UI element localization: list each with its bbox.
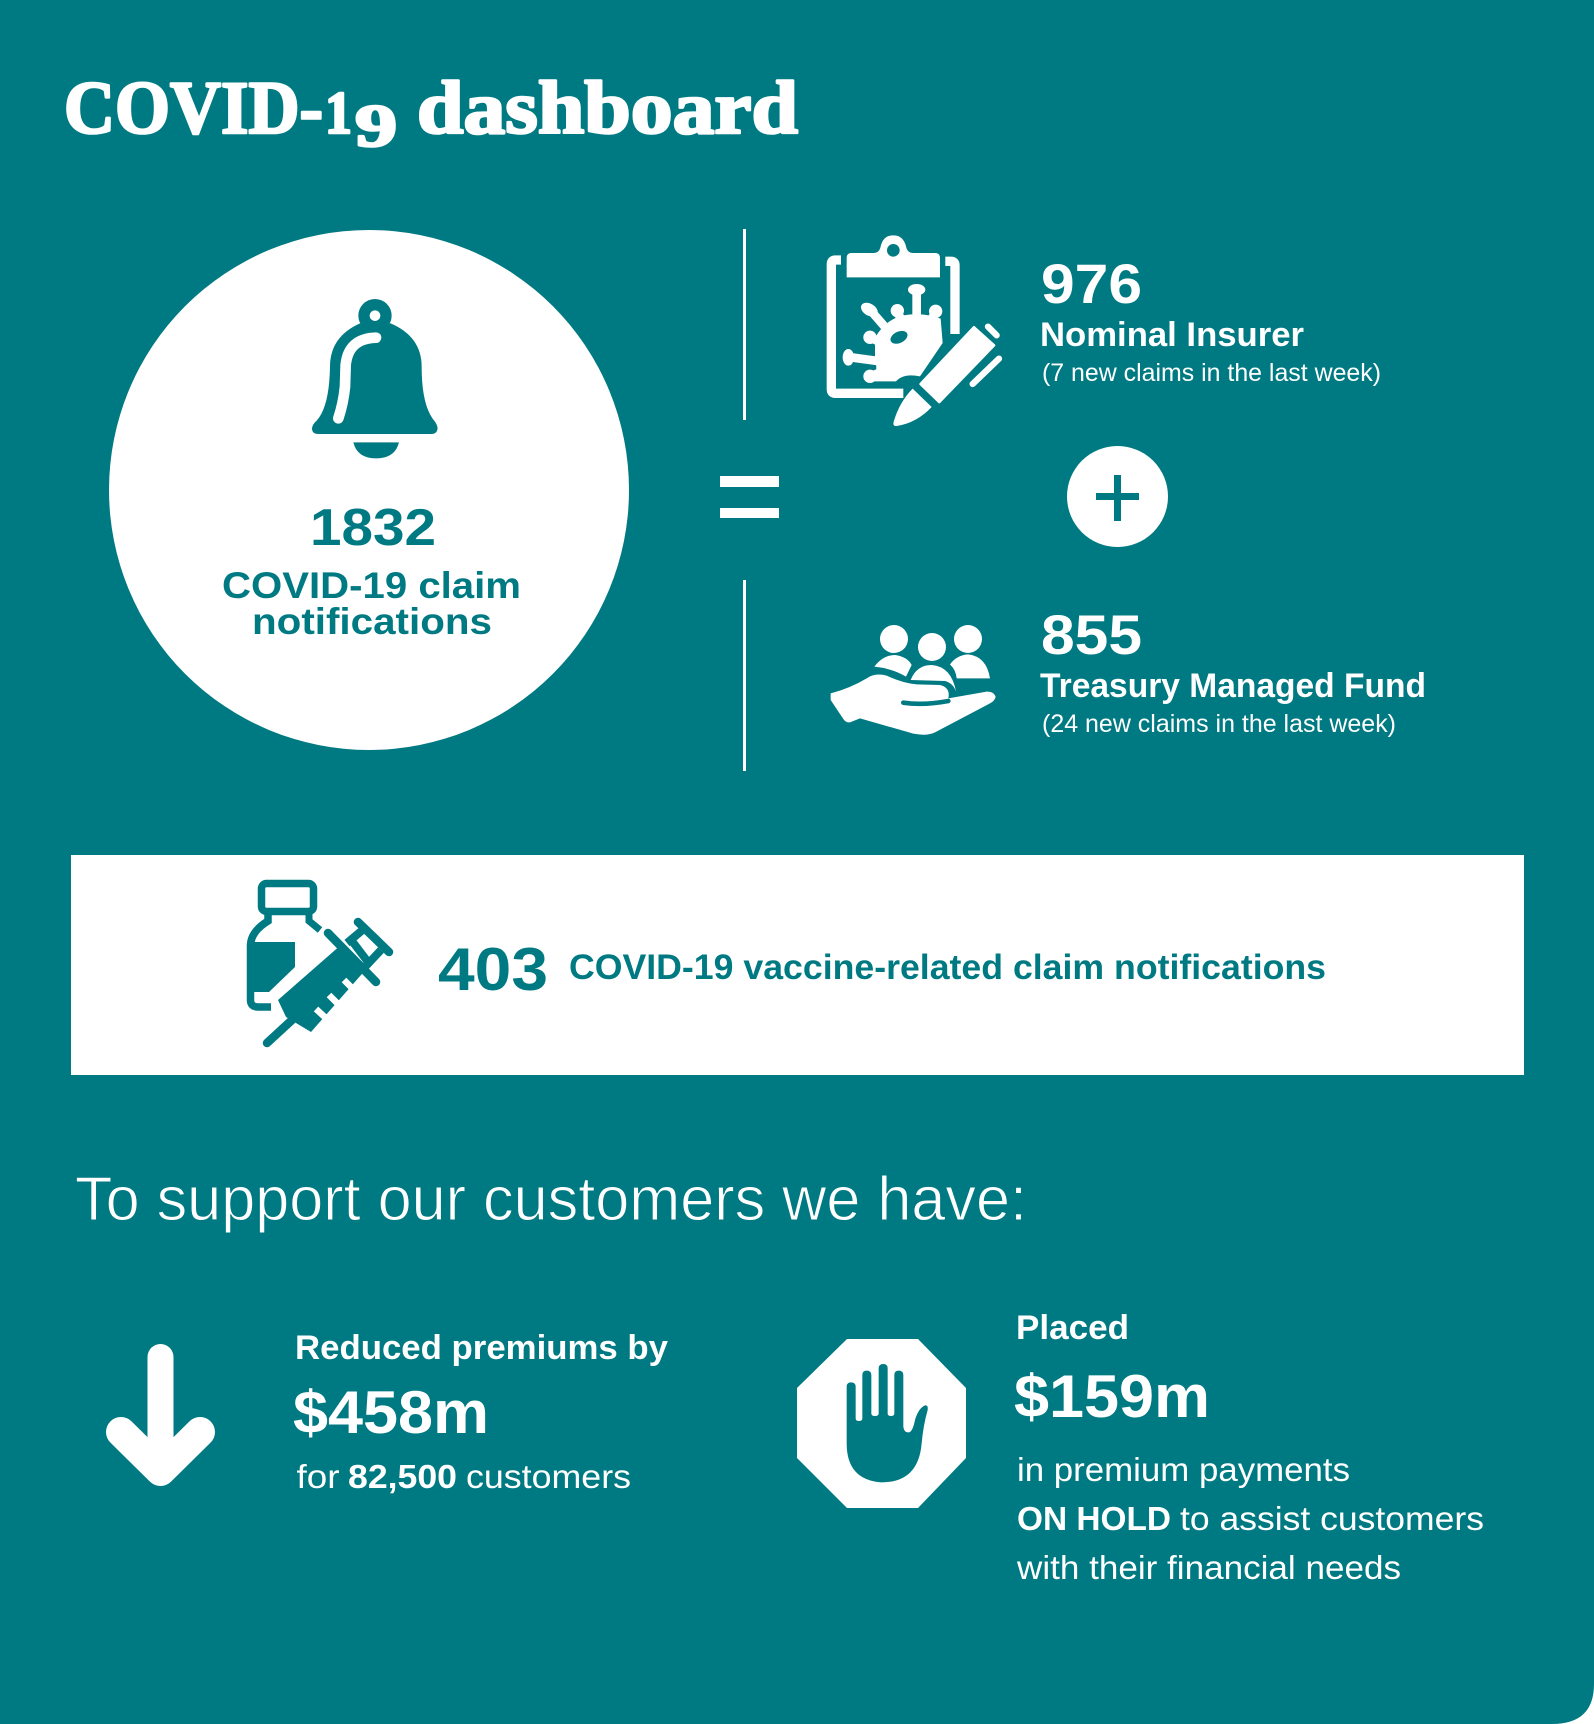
text: reduced premiums: Reduced premiums by: [295, 1329, 668, 1367]
text: premium payments on hold: $159m: [1014, 1363, 1210, 1430]
icon: plus in circle: [1067, 446, 1168, 547]
stat: Nominal Insurer: (7 new claims in the last week): [1042, 359, 1381, 387]
text: premium payments on hold: with their financial needs: [1016, 1549, 1401, 1586]
text: reduced premiums: customers: [466, 1458, 631, 1495]
title: 1: [325, 80, 352, 146]
text: reduced premiums: $458m: [293, 1379, 489, 1446]
total claims label: [222, 565, 521, 642]
equals sign with dividers: [720, 229, 779, 771]
text: premium payments on hold: ON HOLD: [1017, 1500, 1171, 1537]
title: COVID-: [64, 67, 323, 150]
stat: Nominal Insurer: 976: [1041, 252, 1142, 315]
icon: clipboard with virus and pen: [831, 235, 999, 426]
total claims number: 1832: [310, 499, 436, 557]
icon: stop sign with hand: [797, 1339, 966, 1508]
icon: down arrow: [121, 1357, 200, 1471]
title: 9: [355, 93, 397, 159]
stat: Treasury Managed Fund: (24 new claims in the last week): [1042, 710, 1396, 738]
heading: customer support: To support our customers we have:: [75, 1165, 1027, 1234]
text: premium payments on hold: Placed: [1016, 1309, 1129, 1347]
stat: Treasury Managed Fund: Treasury Managed Fund: [1040, 667, 1426, 705]
text: reduced premiums: [293, 1329, 668, 1495]
stat: Treasury Managed Fund: [1040, 603, 1426, 738]
icon: vaccine vial and syringe: [247, 884, 389, 1043]
stat: Nominal Insurer: Nominal Insurer: [1040, 316, 1304, 354]
text: premium payments on hold: [1014, 1309, 1484, 1586]
total claims label: COVID-19 claim: [222, 565, 521, 606]
vaccine claims number: 403: [438, 936, 548, 1003]
panel: vaccine claims band: [71, 855, 1524, 1075]
icon: hand holding people: [831, 625, 996, 735]
icon: bell: [312, 299, 438, 458]
stat: Treasury Managed Fund: 855: [1041, 603, 1142, 666]
text: reduced premiums: 82,500: [348, 1458, 457, 1495]
title: dashboard: [417, 67, 798, 150]
title: [64, 67, 798, 159]
stat: Nominal Insurer: [1040, 252, 1381, 387]
total claims label: notifications: [252, 601, 492, 642]
text: premium payments on hold: in premium payments: [1017, 1451, 1350, 1488]
vaccine claims label: COVID-19 vaccine-related claim notifications: [569, 948, 1326, 987]
text: premium payments on hold: to assist customers: [1180, 1500, 1484, 1537]
panel: total claims circle: [109, 230, 629, 750]
text: reduced premiums: for: [296, 1458, 340, 1495]
